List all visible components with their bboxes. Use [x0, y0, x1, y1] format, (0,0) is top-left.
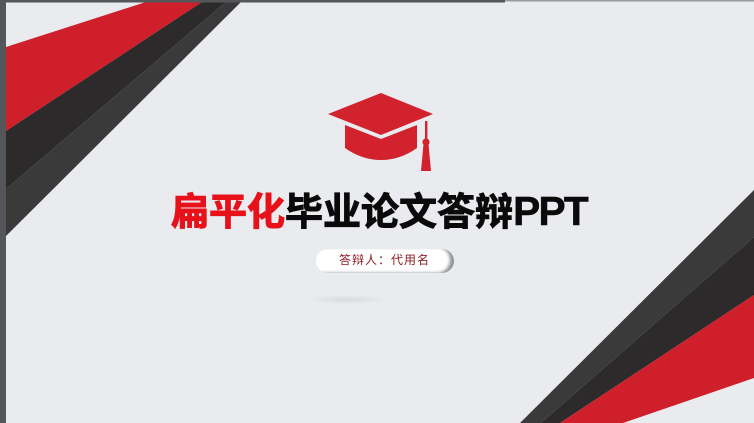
title: 扁平化毕业论文答辩PPT	[171, 188, 587, 234]
presenter pill	[316, 249, 454, 273]
soft shadow	[305, 295, 387, 304]
top-left diagonal bands	[6, 2, 241, 236]
presenter label: 答辩人：代用名	[339, 253, 430, 267]
bottom-right diagonal bands	[520, 190, 754, 423]
